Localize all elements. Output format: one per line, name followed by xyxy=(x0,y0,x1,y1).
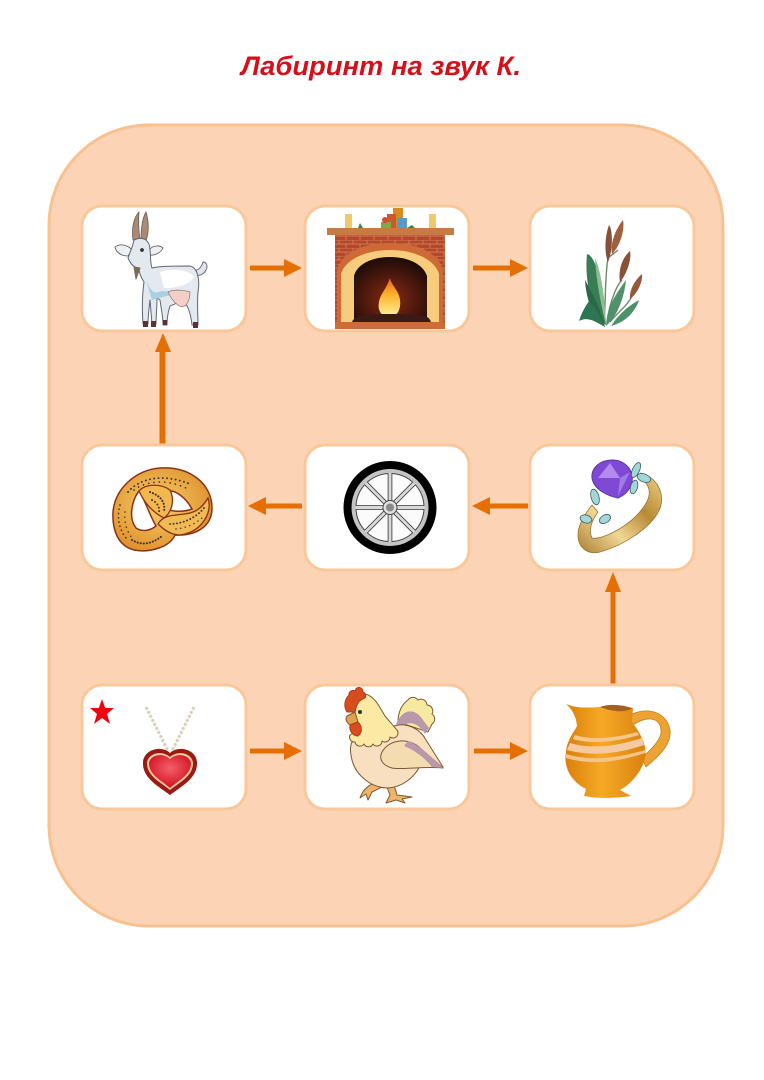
icon: heart necklace xyxy=(143,707,197,795)
arrow: jug up to ring xyxy=(605,572,621,684)
icon: goat xyxy=(115,212,207,328)
icon: pretzel xyxy=(113,468,212,551)
card: necklace xyxy=(82,685,246,809)
arrow: pretzel up to goat xyxy=(155,333,171,444)
card: ring xyxy=(530,445,694,570)
arrow: hen to jug xyxy=(474,742,528,760)
arrow: goat to fireplace xyxy=(250,259,302,277)
panel: maze background xyxy=(49,125,723,926)
card: fireplace xyxy=(305,206,469,331)
card: pretzel xyxy=(82,445,246,570)
icon: jug xyxy=(565,704,670,798)
icon: fireplace xyxy=(327,208,454,329)
icon: wheel xyxy=(344,461,436,554)
arrow: wheel to pretzel xyxy=(248,497,302,515)
icon: ring xyxy=(578,460,662,553)
card: wheel xyxy=(305,445,469,570)
title: Лабиринт на звук К. xyxy=(239,51,521,81)
card: hen xyxy=(305,685,469,809)
arrow: ring to wheel xyxy=(472,497,528,515)
icon: cattail xyxy=(579,220,642,327)
card: cattail xyxy=(530,206,694,331)
card: goat xyxy=(82,206,246,331)
arrow: fireplace to cattail xyxy=(473,259,528,277)
card: jug xyxy=(530,685,694,809)
icon: hen xyxy=(345,687,443,803)
icon: start star xyxy=(90,699,114,724)
arrow: necklace to hen xyxy=(250,742,302,760)
